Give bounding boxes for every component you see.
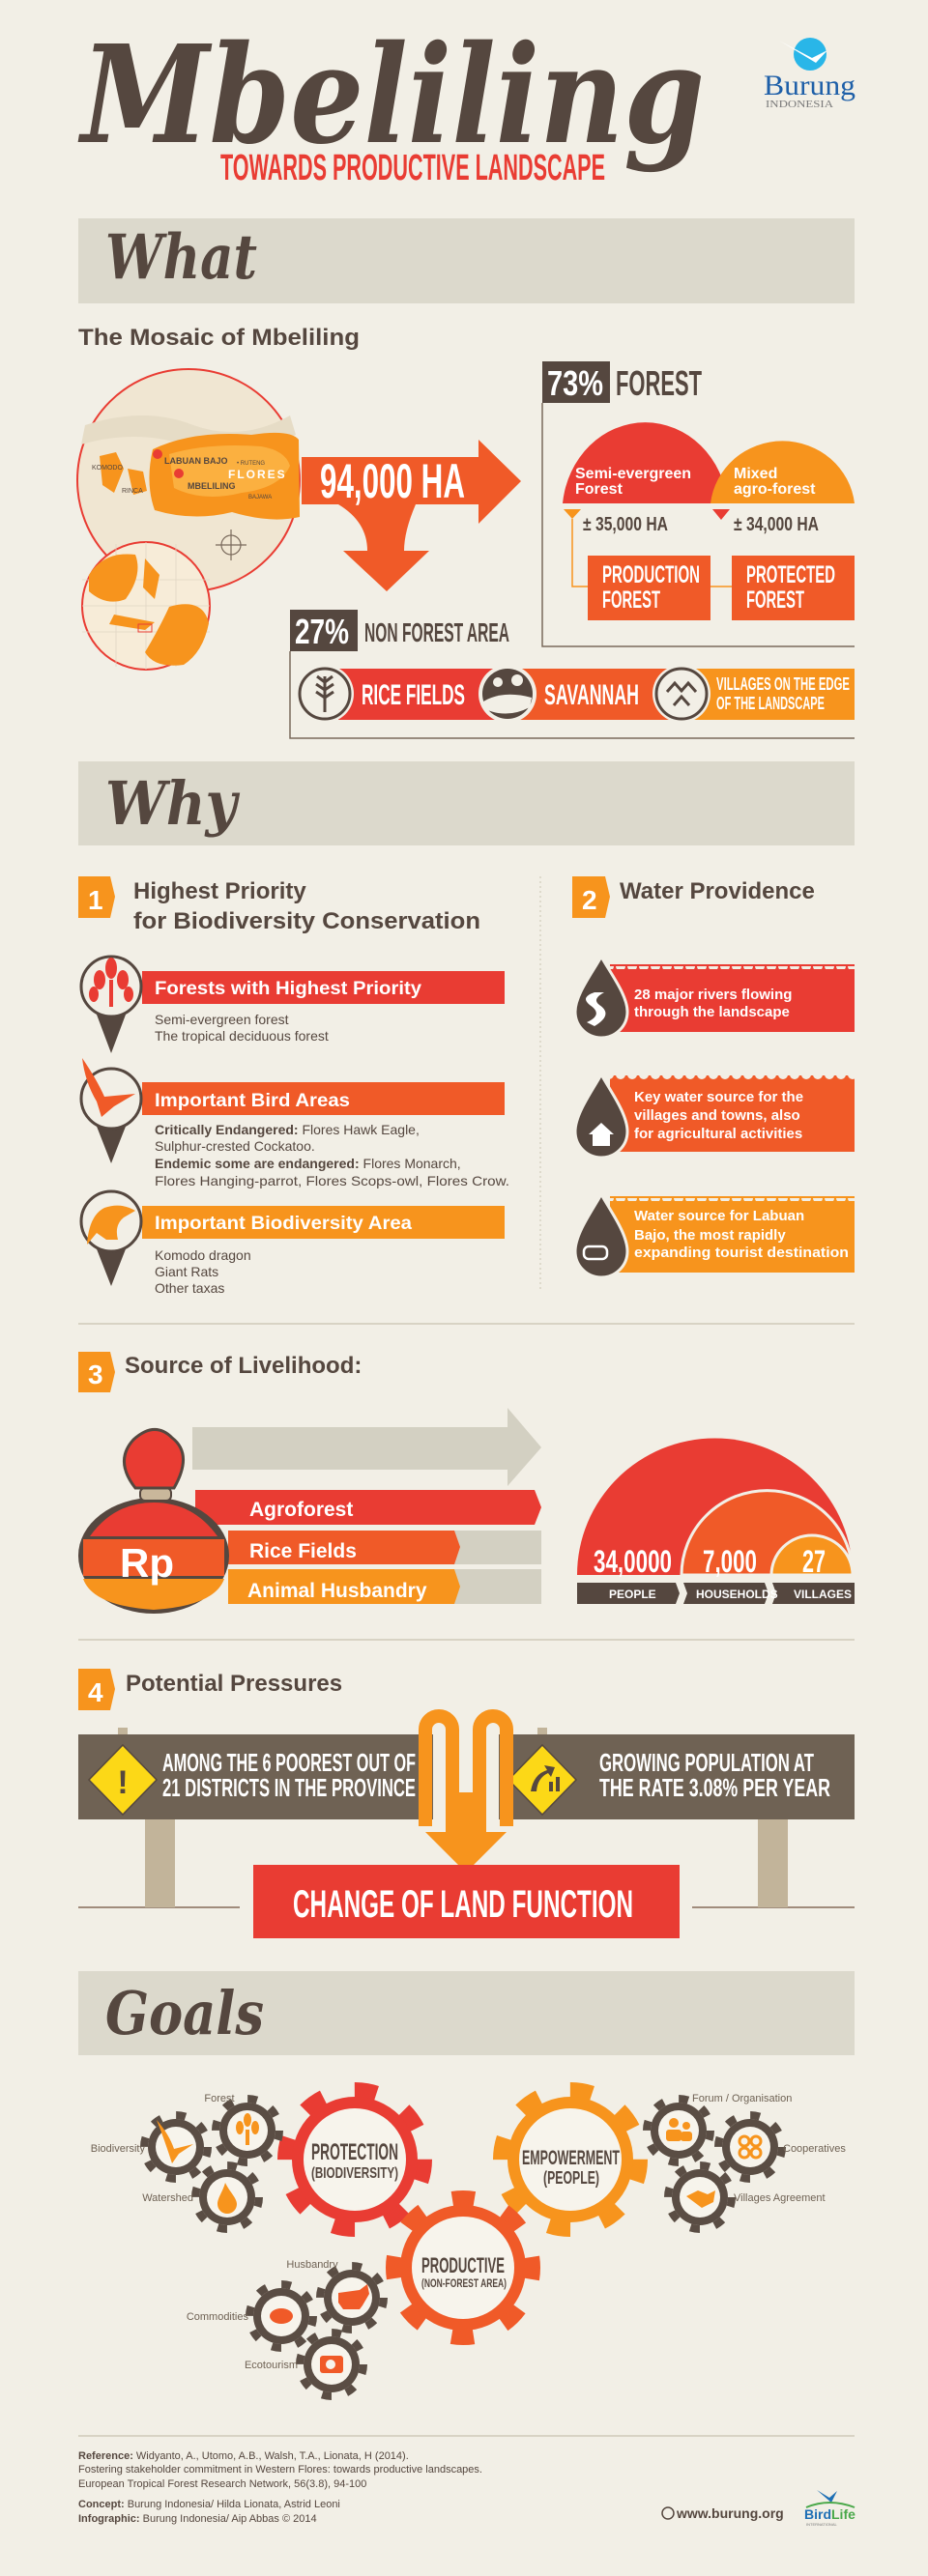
map: Flores: MBELILING: [188, 481, 236, 491]
logo: BirdLife: BirdLife: [804, 2506, 856, 2522]
section 3 heading: [78, 1352, 362, 1392]
gear: empowerment: [501, 2090, 640, 2229]
heading: The Mosaic of Mbeliling: The Mosaic of Mbeliling: [78, 325, 360, 351]
item: important bird areas: [81, 1058, 509, 1188]
chart: people households villages: VILLAGES: [794, 1588, 852, 1601]
sign: poorest districts: 21 DISTRICTS IN THE PROVINCE: [162, 1773, 416, 1802]
item: important bird areas: Important Bird Areas: [155, 1091, 350, 1111]
section 4 heading: 4: [88, 1677, 103, 1707]
small gears: empowerment: [647, 2093, 846, 2229]
box: change of land function: [253, 1865, 680, 1938]
chart: people households villages: PEOPLE: [609, 1588, 656, 1601]
arrow: merging pressures: [425, 1716, 507, 1873]
item: important biodiversity area: Other taxas: [155, 1280, 224, 1296]
water item 2: villages and towns, also: [634, 1107, 800, 1124]
item: forests with highest priority: The tropical deciduous forest: [155, 1028, 329, 1044]
section 1 heading: for Biodiversity Conservation: [133, 908, 480, 934]
icon: commodities: [270, 2308, 293, 2324]
item: important bird areas: Endemic some are endangered: Flores Monarch,: [155, 1156, 461, 1171]
map: Flores: KOMODO: [92, 465, 123, 472]
chart: people households villages: [577, 1439, 855, 1604]
arrow: 94,000 HA: [302, 440, 521, 591]
production forest: FOREST: [602, 587, 660, 614]
livelihood bars: Rice Fields: [249, 1540, 357, 1562]
icon: rice: [296, 665, 354, 723]
footer: references and credits: [78, 2450, 482, 2525]
small gears: protection: Biodiversity: [91, 2143, 145, 2155]
item: forests with highest priority: [81, 957, 505, 1053]
icon: money bag: [78, 1429, 229, 1614]
livelihood bars: Animal Husbandry: [247, 1580, 427, 1602]
gear: productive: PRODUCTIVE: [421, 2253, 505, 2277]
item: important biodiversity area: Giant Rats: [155, 1264, 218, 1279]
panel: 27% non forest area: 27%: [295, 612, 349, 651]
banner: Goals: [78, 1971, 855, 2055]
panel: 27% non forest area: SAVANNAH: [544, 679, 639, 711]
footer: references and credits: Concept: Burung Indonesia/ Hilda Lionata, Astrid Leoni: [78, 2499, 340, 2510]
protected forest: PROTECTED: [746, 561, 835, 588]
logo: Burung Indonesia: INDONESIA: [766, 100, 834, 110]
sign: growing population: [499, 1734, 855, 1819]
chart: people households villages: HOUSEHOLDS: [696, 1588, 778, 1601]
small gears: productive: Commodities: [187, 2311, 248, 2323]
panel: 73% forest: ± 34,000 HA: [734, 514, 819, 535]
item: important biodiversity area: [81, 1191, 505, 1296]
banner: What: [78, 218, 855, 303]
logo: BirdLife: INTERNATIONAL: [806, 2522, 837, 2527]
water item 2: Key water source for the: [634, 1089, 803, 1105]
sign: growing population: THE RATE 3.08% PER YEAR: [599, 1773, 830, 1802]
section 2 heading: [572, 876, 815, 918]
mixed agro-forest: [710, 441, 855, 503]
banner: Goals: Goals: [105, 1978, 264, 2048]
icon: tree: [89, 958, 133, 1007]
semi-evergreen forest: Semi-evergreen: [575, 466, 691, 482]
map: Flores: FLORES: [228, 468, 287, 481]
protected forest: FOREST: [746, 587, 804, 614]
panel: 27% non forest area: NON FOREST AREA: [364, 617, 509, 647]
icon: water drops: [218, 2183, 237, 2214]
water item 1: 28 major rivers flowing: [634, 987, 792, 1003]
sign: poorest districts: !: [117, 1764, 129, 1801]
item: important bird areas: Flores Hanging-parrot, Flores Scops-owl, Flores Crow.: [155, 1173, 509, 1188]
globe: [82, 542, 210, 670]
semi-evergreen forest: [563, 422, 728, 503]
signs: pressures: [78, 1728, 855, 1907]
water item 2: for agricultural activities: [634, 1126, 802, 1142]
icon: cooperatives knot: [740, 2136, 761, 2158]
gear: productive: (NON-FOREST AREA): [421, 2276, 507, 2290]
gear: protection: [285, 2090, 424, 2229]
map: Flores: [77, 369, 300, 591]
banner: Why: [78, 761, 855, 845]
small gears: empowerment: Cooperatives: [783, 2143, 846, 2155]
footer: references and credits: Reference: Widyanto, A., Utomo, A.B., Walsh, T.A., Lionata, H (2014).: [78, 2450, 409, 2462]
small gears: productive: Ecotourism: [245, 2360, 298, 2371]
section 3 heading: Source of Livelihood:: [125, 1353, 362, 1379]
mixed agro-forest: Mixed: [734, 466, 777, 482]
section 3 heading: 3: [88, 1360, 103, 1389]
small gears: protection: [91, 2093, 279, 2229]
small gears: productive: [187, 2259, 384, 2396]
production forest: PRODUCTION: [602, 561, 700, 588]
panel: 27% non forest area: OF THE LANDSCAPE: [716, 694, 825, 713]
chart: people households villages: 34,0000: [594, 1544, 672, 1579]
section 2 heading: Water Providence: [620, 878, 815, 904]
icon: savannah: [478, 665, 536, 723]
icon: bird: [157, 2120, 193, 2163]
footer: references and credits: European Tropical Forest Research Network, 56(3.8), 94-100: [78, 2478, 366, 2490]
footer: website: www.burung.org: [676, 2505, 784, 2521]
section 4 heading: [78, 1669, 342, 1710]
water item 3: [575, 1194, 855, 1277]
map: Flores: • RUTENG: [237, 461, 265, 467]
subtitle: TOWARDS PRODUCTIVE LANDSCAPE: [220, 148, 605, 188]
icon: people: [666, 2118, 692, 2141]
water item 1: through the landscape: [634, 1004, 790, 1020]
section 2 heading: 2: [582, 885, 597, 915]
icon: forest: [236, 2113, 259, 2145]
icon: cow: [338, 2284, 369, 2309]
semi-evergreen forest: Forest: [575, 481, 624, 498]
panel: 27% non forest area: RICE FIELDS: [362, 679, 465, 711]
panel: 27% non forest area: VILLAGES ON THE EDGE: [716, 674, 850, 694]
production forest: [588, 556, 710, 620]
water item 3: Bajo, the most rapidly: [634, 1227, 786, 1244]
gear: empowerment: (PEOPLE): [543, 2168, 599, 2188]
logo: Burung Indonesia: [764, 38, 856, 110]
livelihood bars: [192, 1408, 541, 1604]
panel: 73% forest: [542, 361, 855, 646]
icon: villages: [652, 665, 710, 723]
box: change of land function: CHANGE OF LAND FUNCTION: [293, 1883, 633, 1926]
sign: growing population: GROWING POPULATION AT: [599, 1748, 814, 1777]
gear: productive: [393, 2198, 533, 2337]
water item 2: [575, 1074, 855, 1158]
small gears: protection: Forest: [204, 2093, 235, 2104]
icon: komodo: [87, 1206, 135, 1245]
item: important bird areas: Sulphur-crested Cockatoo.: [155, 1138, 315, 1154]
panel: 73% forest: ± 35,000 HA: [583, 514, 668, 535]
banner: Why: Why: [105, 768, 241, 839]
section 4 heading: Potential Pressures: [126, 1671, 342, 1697]
small gears: empowerment: Villages Agreement: [734, 2192, 826, 2204]
icon: money bag: Rp: [120, 1540, 174, 1586]
map: Flores: BAJAWA: [248, 495, 272, 501]
title: Mbeliling: [78, 16, 705, 175]
banner: What: What: [105, 221, 257, 294]
water item 1: [575, 957, 855, 1038]
map: Flores: RINCA: [122, 488, 143, 495]
water item 3: expanding tourist destination: [634, 1245, 849, 1261]
logo: Burung Indonesia: Burung: [764, 70, 856, 101]
section 1 heading: [78, 876, 480, 934]
small gears: empowerment: Forum / Organisation: [692, 2093, 792, 2104]
section 1 heading: 1: [88, 885, 103, 915]
panel: 73% forest: FOREST: [616, 363, 702, 403]
small gears: protection: Watershed: [142, 2192, 193, 2204]
item: important biodiversity area: Komodo dragon: [155, 1247, 251, 1263]
item: important bird areas: Critically Endangered: Flores Hawk Eagle,: [155, 1122, 420, 1137]
footer: references and credits: Infographic: Burung Indonesia/ Aip Abbas © 2014: [78, 2513, 317, 2525]
item: important biodiversity area: Important Biodiversity Area: [155, 1214, 412, 1234]
icon: eagle: [82, 1058, 135, 1117]
logo: BirdLife: [804, 2490, 856, 2527]
gear: protection: (BIODIVERSITY): [311, 2165, 398, 2182]
item: forests with highest priority: Semi-evergreen forest: [155, 1012, 289, 1027]
sign: poorest districts: [78, 1734, 433, 1819]
panel: 73% forest: 73%: [547, 363, 603, 403]
chart: people households villages: 27: [802, 1544, 826, 1579]
map: Flores: LABUAN BAJO: [164, 456, 228, 466]
panel: 27% non forest area: [290, 610, 855, 738]
arrow: 94,000 HA: 94,000 HA: [320, 454, 465, 508]
small gears: productive: Husbandry: [286, 2259, 338, 2271]
mixed agro-forest: agro-forest: [734, 481, 816, 498]
icon: camera: [320, 2356, 343, 2373]
icon: handshake: [686, 2190, 715, 2208]
sign: poorest districts: AMONG THE 6 POOREST OUT OF: [162, 1748, 416, 1777]
footer: references and credits: Fostering stakeholder commitment in Western Flores: towards productive landscapes.: [78, 2464, 482, 2476]
gear: empowerment: EMPOWERMENT: [522, 2147, 620, 2169]
water item 3: Water source for Labuan: [634, 1208, 804, 1224]
livelihood bars: Agroforest: [249, 1499, 353, 1521]
gear: protection: PROTECTION: [311, 2139, 398, 2165]
chart: people households villages: 7,000: [703, 1544, 757, 1579]
protected forest: [732, 556, 855, 620]
section 1 heading: Highest Priority: [133, 878, 306, 904]
item: forests with highest priority: Forests with Highest Priority: [155, 979, 421, 999]
